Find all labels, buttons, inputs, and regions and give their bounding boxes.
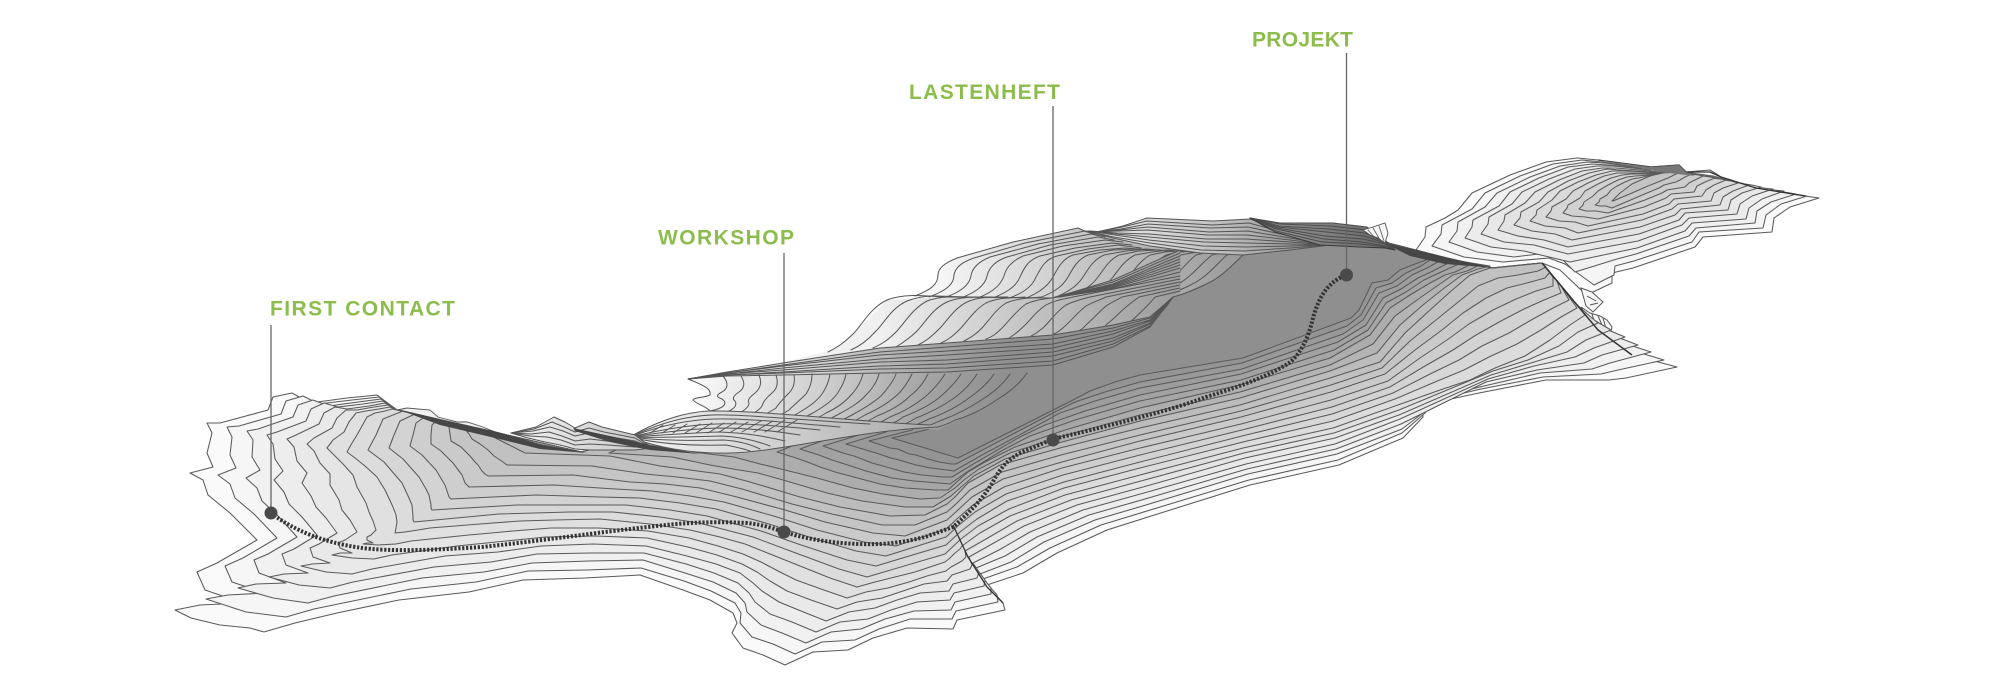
label: First Contact: FIRST CONTACT <box>270 298 455 320</box>
terrain: small ridge bumps on the left <box>397 408 652 450</box>
milestone: Lastenheft <box>909 81 1060 446</box>
terrain: creases and top right band <box>953 160 1805 603</box>
terrain: side flaps on the right crease <box>1581 288 1612 336</box>
terrain: back wall lower tier <box>688 297 1173 432</box>
terrain: back wall upper tier <box>915 228 1243 302</box>
label: Lastenheft: LASTENHEFT <box>909 81 1060 104</box>
terrain: central hump <box>630 411 938 453</box>
milestone: First Contact <box>264 298 455 520</box>
label: Workshop: WORKSHOP <box>658 226 794 250</box>
terrain: upper right wing <box>1416 158 1819 305</box>
terrain: main front contour rings <box>175 225 1677 665</box>
milestone: Projekt <box>1252 28 1353 282</box>
terrain: dark ridge tapers <box>397 243 1495 454</box>
route: dotted path through the milestones <box>271 275 1346 550</box>
terrain: top band humps <box>1085 218 1395 255</box>
milestone: Workshop <box>658 226 794 538</box>
terrain: back wall middle tier <box>750 250 1180 370</box>
label: Projekt: PROJEKT <box>1252 28 1353 52</box>
